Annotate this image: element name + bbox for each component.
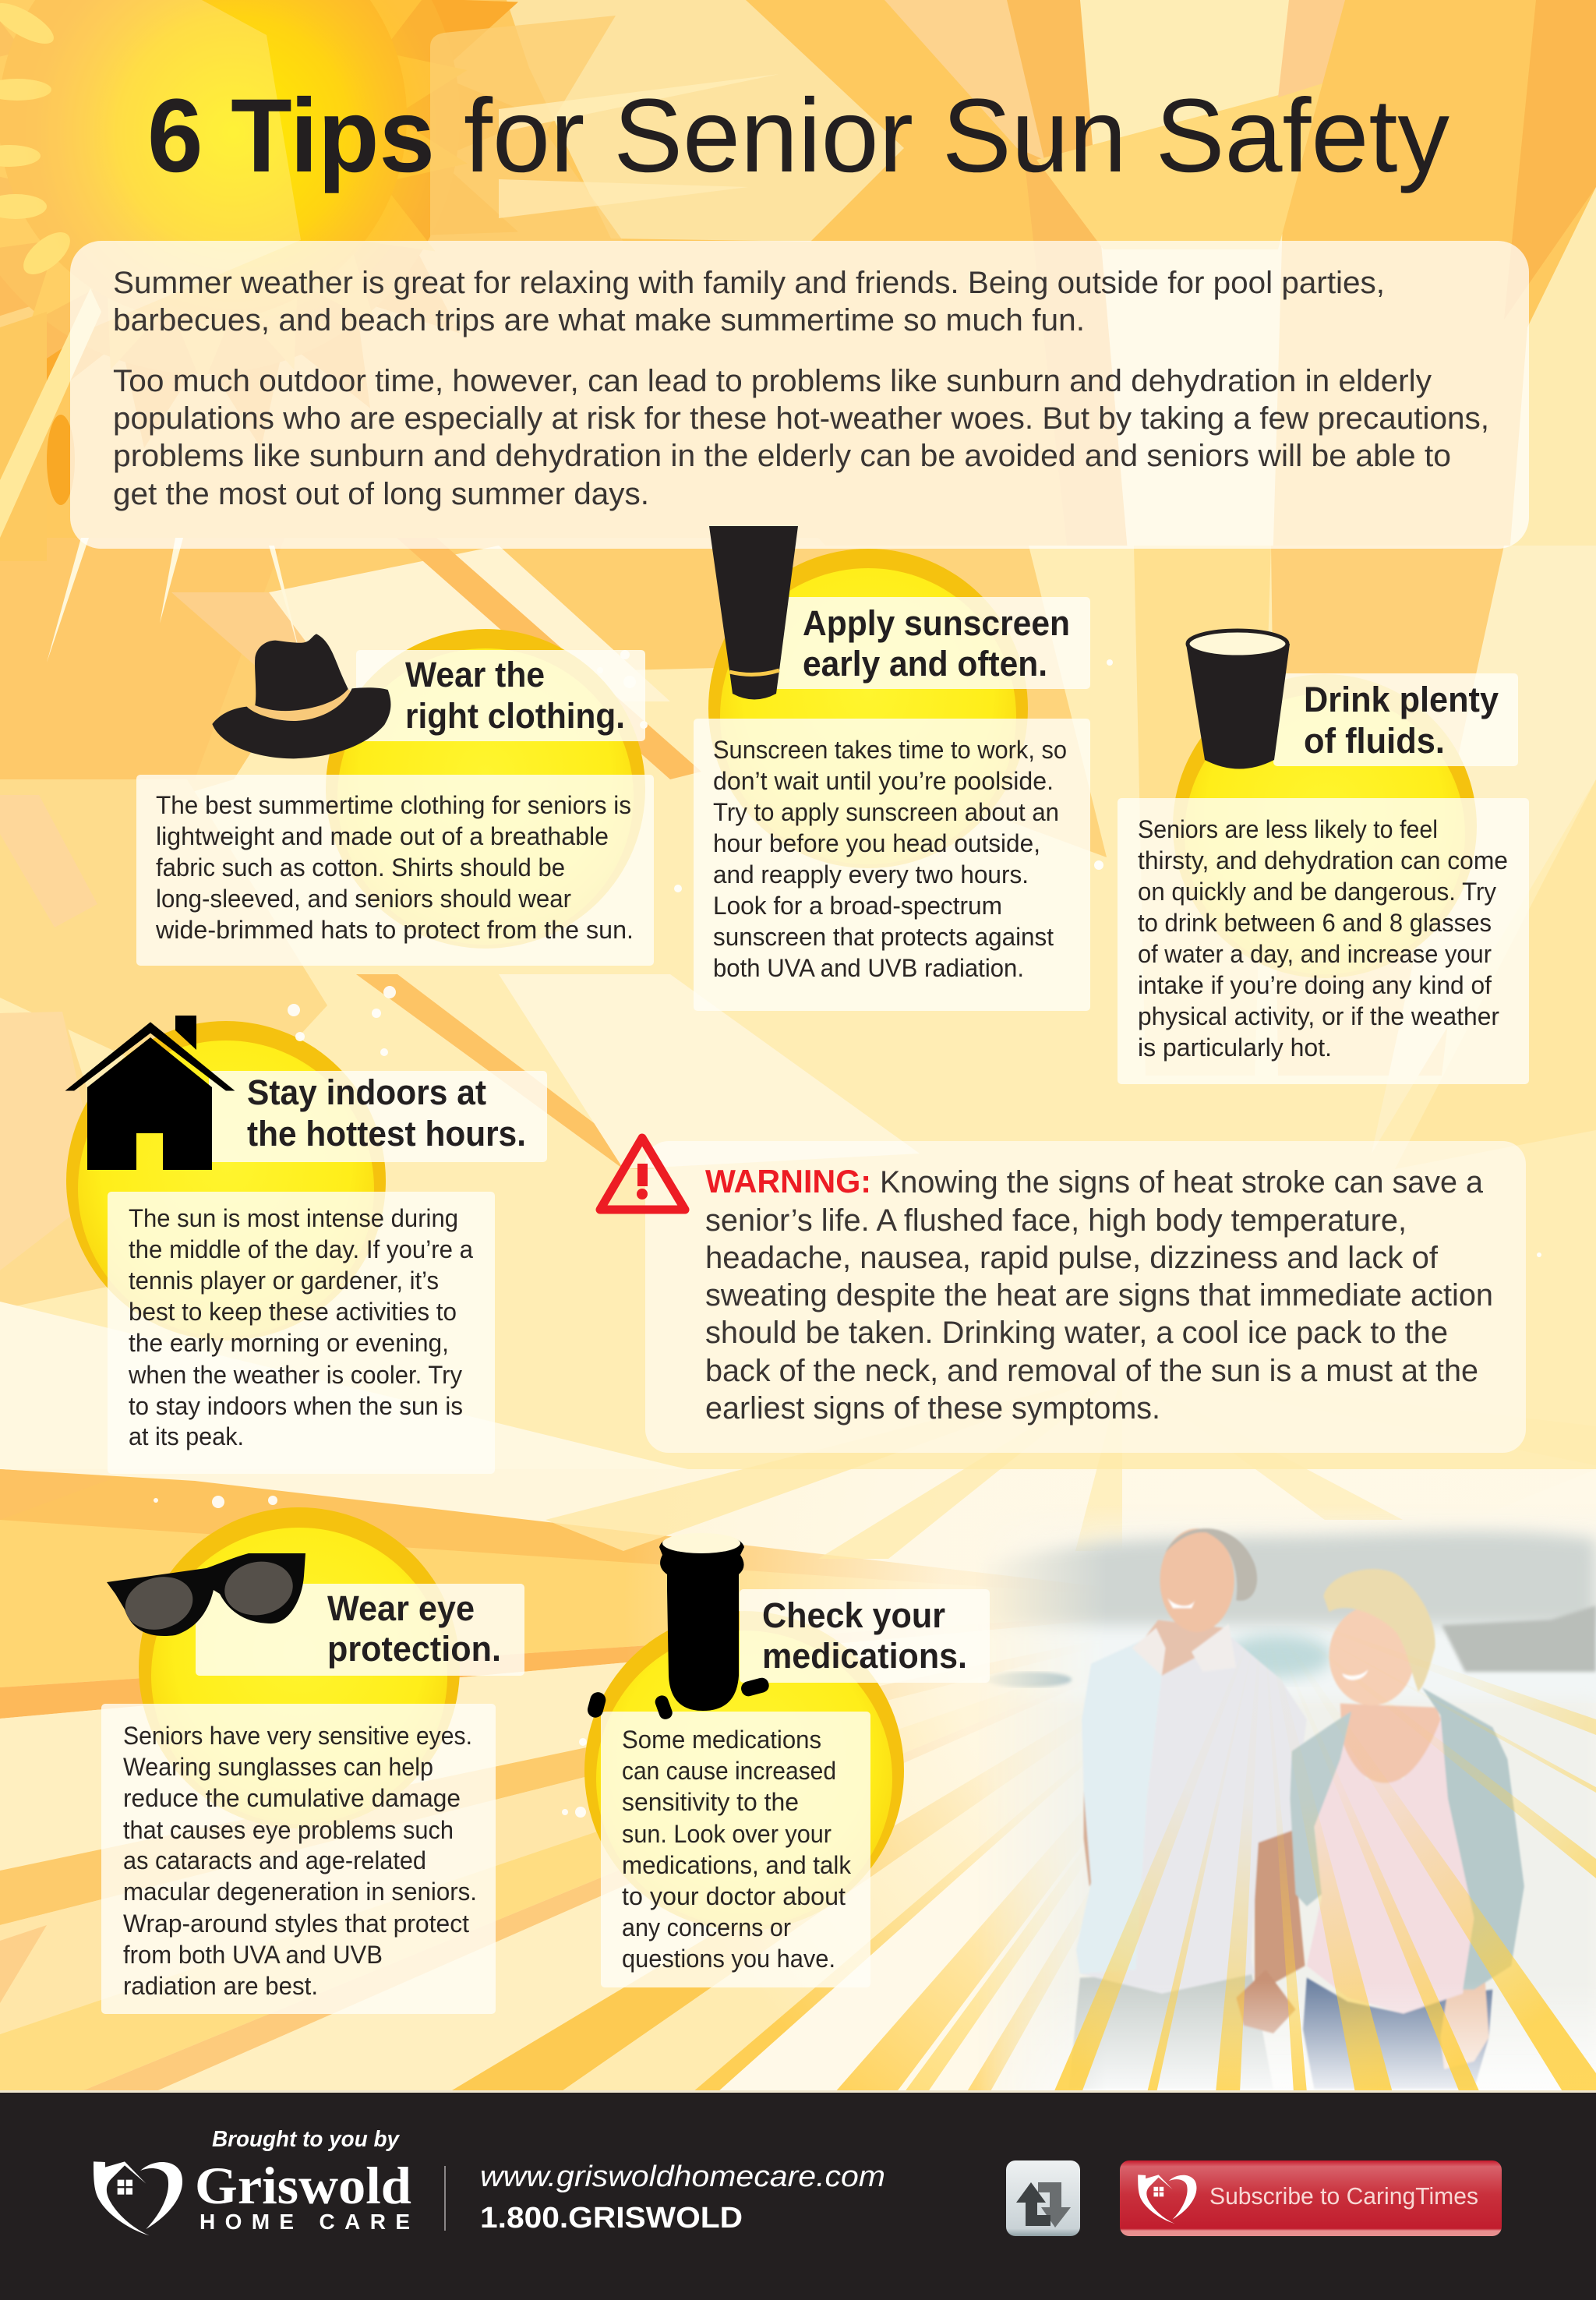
text block: hottest hours advice: best to keep these activities to xyxy=(129,1298,457,1326)
title: 6 Tips xyxy=(147,78,435,194)
subscribe button: Subscribe to CaringTimes xyxy=(1209,2182,1478,2210)
text block: hydration advice: on quickly and be dangerous. Try xyxy=(1138,878,1496,906)
text block: sunscreen advice: sunscreen that protects against xyxy=(713,923,1054,951)
photo: senior couple on the beach xyxy=(935,1504,1596,2097)
text block: warning signs: sweating despite the heat are signs that immediate action xyxy=(705,1278,1493,1313)
text block: clothing advice: long-sleeved, and seniors should wear xyxy=(156,885,571,913)
text block: eye advice: as cataracts and age-related xyxy=(123,1846,426,1874)
heading: apply sunscreen: early and often. xyxy=(803,644,1047,684)
icon: glass of water xyxy=(1186,631,1290,768)
logo: griswold home care: Griswold xyxy=(195,2156,411,2215)
text block: sunscreen advice xyxy=(694,719,1090,1011)
text block: sunscreen advice: hour before you head outside, xyxy=(713,829,1040,857)
text block: eye advice: Wrap-around styles that protect xyxy=(123,1910,469,1938)
text block: sunscreen advice: and reapply every two hours. xyxy=(713,860,1029,889)
panel: intro text: barbecues, and beach trips are what make summertime so much fun. xyxy=(113,303,1085,337)
text block: warning signs: senior’s life. A flushed face, high body temperature, xyxy=(705,1203,1407,1238)
text block: warning signs: back of the neck, and removal of the sun is a must at the xyxy=(705,1354,1478,1388)
icon: hat xyxy=(212,634,390,758)
text block: warning signs: WARNING: xyxy=(705,1163,871,1199)
icon: house xyxy=(66,1016,234,1170)
tip 4: stay indoors xyxy=(66,1016,547,1474)
text block: medication advice: sensitivity to the xyxy=(622,1788,799,1816)
text block: hottest hours advice: tennis player or gardener, it’s xyxy=(129,1267,439,1295)
text block: hydration advice: physical activity, or if the weather xyxy=(1138,1002,1499,1030)
logo: griswold home care xyxy=(94,2156,411,2235)
text block: eye advice: Wearing sunglasses can help xyxy=(123,1753,433,1781)
text block: hydration advice: Seniors are less likely to feel xyxy=(1138,815,1438,843)
footer xyxy=(0,2090,1596,2300)
text block: hottest hours advice xyxy=(108,1192,495,1474)
text block: medication advice: can cause increased xyxy=(622,1757,836,1785)
icon: sunglasses xyxy=(107,1553,305,1637)
heading: check medications xyxy=(740,1589,990,1683)
text block: clothing advice xyxy=(136,775,654,966)
text block: hydration advice: intake if you’re doing any kind of xyxy=(1138,971,1492,999)
big sun top-left xyxy=(0,0,779,662)
text block: eye advice: that causes eye problems such xyxy=(123,1816,454,1844)
heading: eye protection: Wear eye xyxy=(327,1588,475,1628)
text block: medication advice: any concerns or xyxy=(622,1913,791,1941)
panel: intro text: Summer weather is great for relaxing with family and friends. Being outside for pool parties, xyxy=(113,266,1385,300)
text block: warning signs: headache, nausea, rapid pulse, dizziness and lack of xyxy=(705,1241,1439,1275)
heading: wear the right clothing xyxy=(356,650,645,741)
text block: sunscreen advice: Try to apply sunscreen about an xyxy=(713,798,1059,826)
panel: intro text: problems like sunburn and dehydration in the elderly can be avoided and seniors will be able to xyxy=(113,439,1451,473)
text block: hottest hours advice: to stay indoors when the sun is xyxy=(129,1392,463,1420)
tip 1: wear the right clothing xyxy=(136,634,654,966)
sun discs behind tips xyxy=(66,549,1477,1931)
panel: intro text: get the most out of long summer days. xyxy=(113,477,649,511)
text block: medication advice xyxy=(601,1712,870,1987)
text block: warning signs: should be taken. Drinking water, a cool ice pack to the xyxy=(705,1316,1448,1350)
sparkles xyxy=(154,650,1541,1818)
panel: intro text xyxy=(70,241,1529,549)
text block: eye advice xyxy=(101,1704,496,2014)
heading: stay indoors: Stay indoors at xyxy=(247,1072,486,1112)
heading: stay indoors xyxy=(209,1071,547,1162)
text block: medication advice: to your doctor about xyxy=(622,1882,846,1910)
text block: hydration advice: to drink between 6 and 8 glasses xyxy=(1138,909,1492,937)
text block: hydration advice: is particularly hot. xyxy=(1138,1033,1332,1062)
text block: sunscreen advice: Sunscreen takes time to work, so xyxy=(713,736,1067,764)
contact: website and phone xyxy=(480,2160,885,2235)
text block: clothing advice: fabric such as cotton. Shirts should be xyxy=(156,853,565,881)
lower area, rays toward a common vanishing point xyxy=(0,1469,1596,1606)
heading: check medications: Check your xyxy=(762,1595,945,1635)
text block: sunscreen advice: both UVA and UVB radiation. xyxy=(713,954,1024,982)
brought to you by: Brought to you by xyxy=(212,2127,401,2152)
tip 2: apply sunscreen xyxy=(694,526,1090,1011)
heading: eye protection: protection. xyxy=(327,1629,501,1669)
heading: wear the right clothing: Wear the xyxy=(405,655,545,694)
icon: retweet button xyxy=(1006,2160,1080,2236)
text block: medication advice: Some medications xyxy=(622,1726,821,1754)
text block: eye advice: Seniors have very sensitive eyes. xyxy=(123,1722,472,1750)
upper area xyxy=(0,0,1596,561)
icon: pill bottle xyxy=(586,1533,771,1721)
text block: hottest hours advice: the middle of the day. If you’re a xyxy=(129,1235,473,1263)
text block: warning signs: earliest signs of these symptoms. xyxy=(705,1391,1160,1426)
text block: hydration advice: thirsty, and dehydration can come xyxy=(1138,846,1508,874)
text block: eye advice: macular degeneration in seniors. xyxy=(123,1878,477,1906)
text block: medication advice: questions you have. xyxy=(622,1945,835,1973)
text block: hottest hours advice: when the weather is cooler. Try xyxy=(128,1361,462,1389)
logo: griswold home care: HOME CARE xyxy=(200,2210,410,2234)
text block: clothing advice: lightweight and made out of a breathable xyxy=(156,822,609,850)
contact: website and phone: 1.800.GRISWOLD xyxy=(480,2202,743,2235)
text block: hottest hours advice: The sun is most intense during xyxy=(129,1204,458,1232)
heading: drink fluids: of fluids. xyxy=(1304,721,1445,761)
text block: sunscreen advice: Look for a broad-spectrum xyxy=(713,892,1002,920)
contact: website and phone: www.griswoldhomecare.com xyxy=(480,2160,885,2193)
panel: intro text: Too much outdoor time, however, can lead to problems like sunburn and dehydration in elderly xyxy=(113,364,1432,398)
text block: warning signs xyxy=(705,1163,1493,1426)
subscribe button xyxy=(1120,2160,1502,2236)
heading: drink fluids xyxy=(1273,673,1518,766)
heading: check medications: medications. xyxy=(762,1636,967,1676)
heading: stay indoors: the hottest hours. xyxy=(247,1114,526,1154)
heading: eye protection xyxy=(196,1584,524,1676)
text block: clothing advice: The best summertime clothing for seniors is xyxy=(156,791,631,819)
heading: drink fluids: Drink plenty xyxy=(1304,680,1499,719)
text block: sunscreen advice: don’t wait until you’re poolside. xyxy=(713,767,1054,795)
text block: eye advice: from both UVA and UVB xyxy=(123,1941,383,1969)
heading: wear the right clothing: right clothing. xyxy=(405,696,625,736)
text block: medication advice: medications, and talk xyxy=(622,1851,852,1879)
text block: hydration advice xyxy=(1118,798,1529,1084)
panel: intro text: populations who are especially at risk for these hot-weather woes. But by taking a few precautions, xyxy=(113,401,1489,436)
man xyxy=(1084,1791,1100,1886)
middle area xyxy=(0,546,1596,1520)
panel: warning xyxy=(645,1141,1526,1453)
warning callout xyxy=(600,1138,1526,1453)
text block: eye advice: reduce the cumulative damage xyxy=(123,1784,461,1812)
tip 5: wear eye protection xyxy=(101,1553,524,2014)
text block: clothing advice: wide-brimmed hats to protect from the sun. xyxy=(155,916,634,944)
title: for Senior Sun Safety xyxy=(464,78,1449,194)
text block: hottest hours advice: at its peak. xyxy=(129,1422,244,1450)
text block: eye advice: radiation are best. xyxy=(123,1972,318,2000)
woman xyxy=(1303,1978,1492,2089)
text block: medication advice: sun. Look over your xyxy=(622,1820,832,1848)
icon: sunscreen tube xyxy=(709,526,798,700)
text block: warning signs: Knowing the signs of heat stroke can save a xyxy=(880,1165,1484,1199)
heading: apply sunscreen xyxy=(750,597,1090,689)
icon: warning triangle xyxy=(600,1138,685,1210)
text block: hydration advice: of water a day, and increase your xyxy=(1138,940,1492,968)
heading: apply sunscreen: Apply sunscreen xyxy=(803,603,1070,643)
tip 3: drink plenty of fluids xyxy=(1118,631,1529,1084)
tip 6: check your medications xyxy=(586,1533,990,1987)
text block: hottest hours advice: the early morning or evening, xyxy=(129,1329,449,1357)
